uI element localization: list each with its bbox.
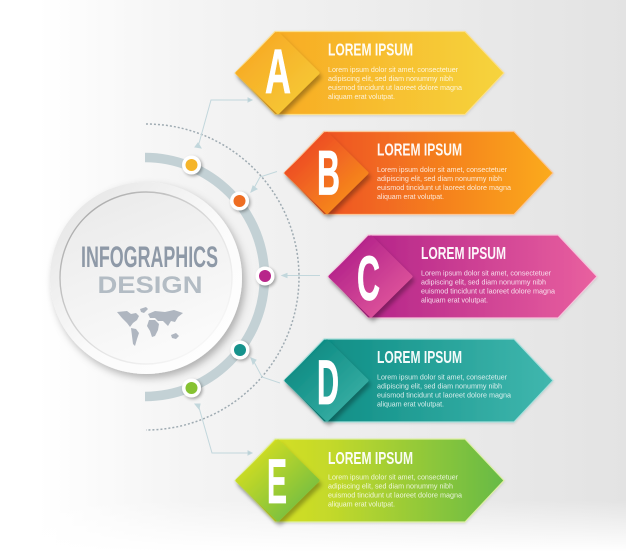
banner shape	[235, 32, 504, 114]
body text: adipiscing elit, sed diam nonummy nibh	[328, 74, 453, 83]
panel: E	[235, 439, 504, 522]
title: LOREM IPSUM	[328, 448, 413, 468]
body text: adipiscing elit, sed diam nonummy nibh	[328, 482, 453, 490]
body text: aliquam erat volutpat.	[377, 400, 444, 408]
title: LOREM IPSUM	[328, 40, 413, 60]
panel: C	[328, 235, 597, 318]
title: LOREM IPSUM	[421, 243, 506, 263]
solid gray arc	[145, 158, 264, 396]
body text	[377, 372, 512, 408]
body text: adipiscing elit, sed diam nonummy nibh	[377, 382, 502, 390]
diamond	[237, 441, 318, 520]
body text: euismod tincidunt ut laoreet dolore magna	[328, 83, 463, 92]
letter: B	[317, 138, 340, 208]
node: E green	[182, 378, 201, 398]
body text: Lorem ipsum dolor sit amet, consectetuer	[421, 268, 552, 278]
title: LOREM IPSUM	[377, 140, 462, 160]
title: LOREM IPSUM	[377, 347, 462, 367]
panel: A	[235, 32, 504, 114]
connector: D	[251, 358, 280, 383]
inner disc	[60, 192, 232, 364]
panel: E: E	[267, 447, 287, 517]
banner shape	[284, 132, 553, 214]
heading: infographics: INFOGRAPHICS	[81, 241, 218, 274]
body text: aliquam erat volutpat.	[328, 500, 395, 508]
icon: world map	[117, 307, 183, 346]
connector: E	[195, 404, 252, 455]
body text: euismod tincidunt ut laoreet dolore magna	[328, 490, 463, 500]
body text: adipiscing elit, sed diam nonummy nibh	[421, 278, 546, 286]
body text: Lorem ipsum dolor sit amet, consectetuer	[328, 472, 459, 482]
panel: D: D	[317, 348, 339, 418]
diamond	[286, 341, 367, 420]
letter: A	[265, 37, 291, 107]
connector: C	[282, 274, 320, 278]
body text: euismod tincidunt ut laoreet dolore magna	[377, 183, 512, 192]
banner shape	[328, 235, 597, 318]
body text: Lorem ipsum dolor sit amet, consectetuer	[377, 165, 508, 174]
banner shape	[284, 339, 553, 422]
node: B orange	[230, 192, 249, 210]
body text: Lorem ipsum dolor sit amet, consectetuer	[377, 372, 508, 382]
diamond	[237, 34, 318, 112]
node: A yellow	[182, 156, 201, 174]
body text: euismod tincidunt ut laoreet dolore magna	[421, 286, 556, 296]
panel: B	[284, 132, 553, 214]
node: D teal	[230, 340, 250, 360]
banner shape	[235, 439, 504, 522]
body text: euismod tincidunt ut laoreet dolore magna	[377, 390, 512, 400]
body text: aliquam erat volutpat.	[377, 192, 444, 201]
body text: Lorem ipsum dolor sit amet, consectetuer	[328, 65, 459, 74]
diamond	[286, 134, 367, 212]
heading: design: DESIGN	[98, 272, 202, 299]
connector: A	[195, 98, 252, 148]
diamond	[330, 237, 411, 316]
body text	[377, 165, 512, 201]
body text: aliquam erat volutpat.	[421, 296, 488, 304]
connector: B	[251, 172, 277, 192]
body text: adipiscing elit, sed diam nonummy nibh	[377, 174, 502, 183]
body text	[328, 472, 463, 508]
outer ring	[50, 182, 242, 374]
panel: D	[284, 339, 553, 422]
letter: C	[357, 244, 380, 314]
dashed outer arc	[146, 124, 299, 430]
body text: aliquam erat volutpat.	[328, 92, 395, 101]
body text	[328, 65, 463, 101]
central circle	[50, 182, 242, 374]
node: C magenta	[256, 266, 274, 286]
body text	[421, 268, 556, 304]
